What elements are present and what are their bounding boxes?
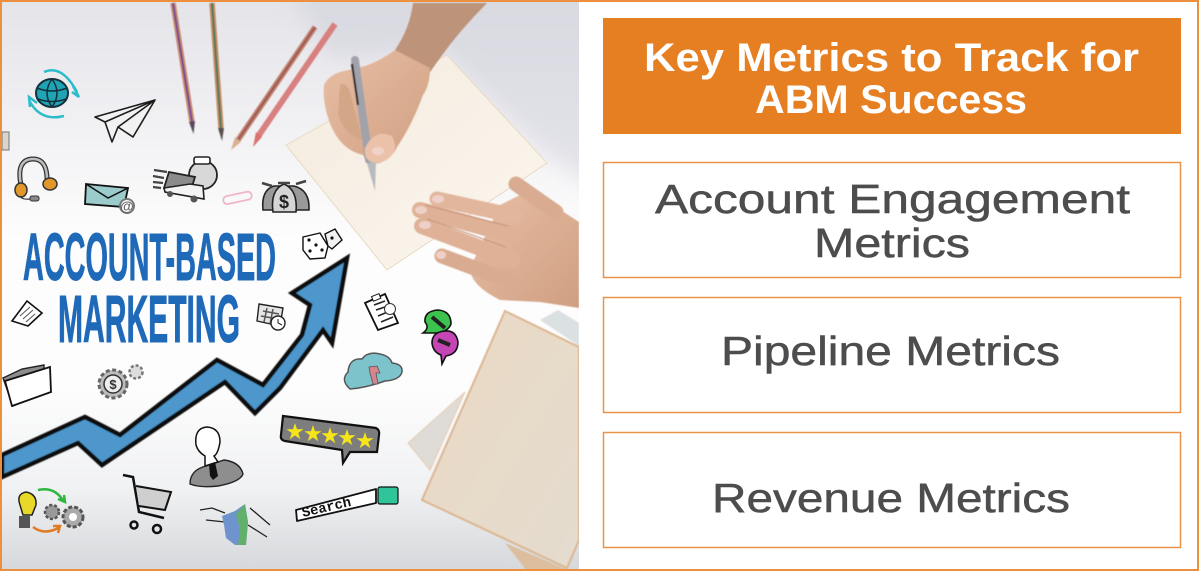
icon: money bags: $	[279, 192, 289, 212]
icon: rating bubble with five stars: ★	[285, 419, 305, 444]
icon: lightbulb, gears and arrows	[19, 489, 83, 533]
panel: account engagement metrics	[604, 162, 1180, 278]
flat resting hand	[415, 184, 579, 308]
icon: gears with dollar sign	[99, 366, 142, 398]
text: account engagement metrics: Account Engagement	[655, 176, 1131, 222]
icon: paperclip	[222, 191, 253, 205]
icon: memo and pencil	[12, 301, 42, 326]
text: revenue metrics: Revenue Metrics	[712, 475, 1070, 521]
icon: globe with arrows	[29, 70, 79, 117]
icon: money bags	[262, 181, 309, 212]
icon: search bar	[296, 487, 398, 522]
icon: clipboard	[365, 294, 398, 330]
icon: search bar: Search	[301, 495, 353, 522]
stacked notebooks	[408, 310, 579, 571]
panel: photo of desk with account-based marketing sketch	[2, 0, 600, 571]
icon: rating bubble with five stars: ★	[303, 421, 323, 446]
heading: account-based marketing lettering	[23, 232, 275, 343]
title text: Key Metrics to Track for	[644, 36, 1139, 80]
notepad under writing hand	[286, 55, 547, 270]
icon: folder	[3, 365, 51, 406]
panel: title banner	[603, 18, 1181, 134]
text: account engagement metrics: Metrics	[814, 220, 970, 266]
icon: paper plane	[95, 100, 155, 142]
chart arrow: rising growth line	[2, 258, 347, 477]
icon: dice	[303, 229, 342, 259]
icon: gears with dollar sign: $	[109, 377, 117, 392]
icon: businessman	[190, 427, 243, 487]
text: pipeline metrics: Pipeline Metrics	[721, 328, 1060, 374]
icon: speech bubbles	[423, 310, 458, 364]
panel: pipeline metrics	[604, 298, 1180, 412]
panel: revenue metrics	[604, 432, 1180, 548]
writing hand with pen	[324, 3, 487, 191]
icon: rating bubble with five stars: ★	[320, 423, 340, 448]
icon: rating bubble with five stars: ★	[355, 428, 375, 453]
title text: ABM Success	[755, 78, 1027, 122]
icon: rating bubble with five stars	[281, 416, 379, 463]
heading: account-based marketing lettering: MARKETING	[58, 282, 240, 357]
icon: stray object at left edge	[2, 132, 9, 150]
icon: rating bubble with five stars: ★	[337, 425, 357, 450]
pencils	[173, 3, 335, 150]
icon: calendar with clock	[257, 304, 285, 330]
icon: shopping cart	[123, 475, 171, 533]
icon: hands with puzzle pieces	[200, 504, 270, 545]
panel: photo of desk with account-based marketing sketch: ACCOUNT-BASED	[23, 220, 276, 295]
icon: headset	[15, 159, 57, 201]
icon: delivery truck with stopwatch	[153, 157, 217, 202]
icon: cloud with upload arrow	[344, 353, 402, 389]
desk surface	[2, 0, 600, 569]
icon: envelope with at sign	[85, 184, 134, 214]
icon: envelope with at sign: @	[120, 198, 134, 214]
